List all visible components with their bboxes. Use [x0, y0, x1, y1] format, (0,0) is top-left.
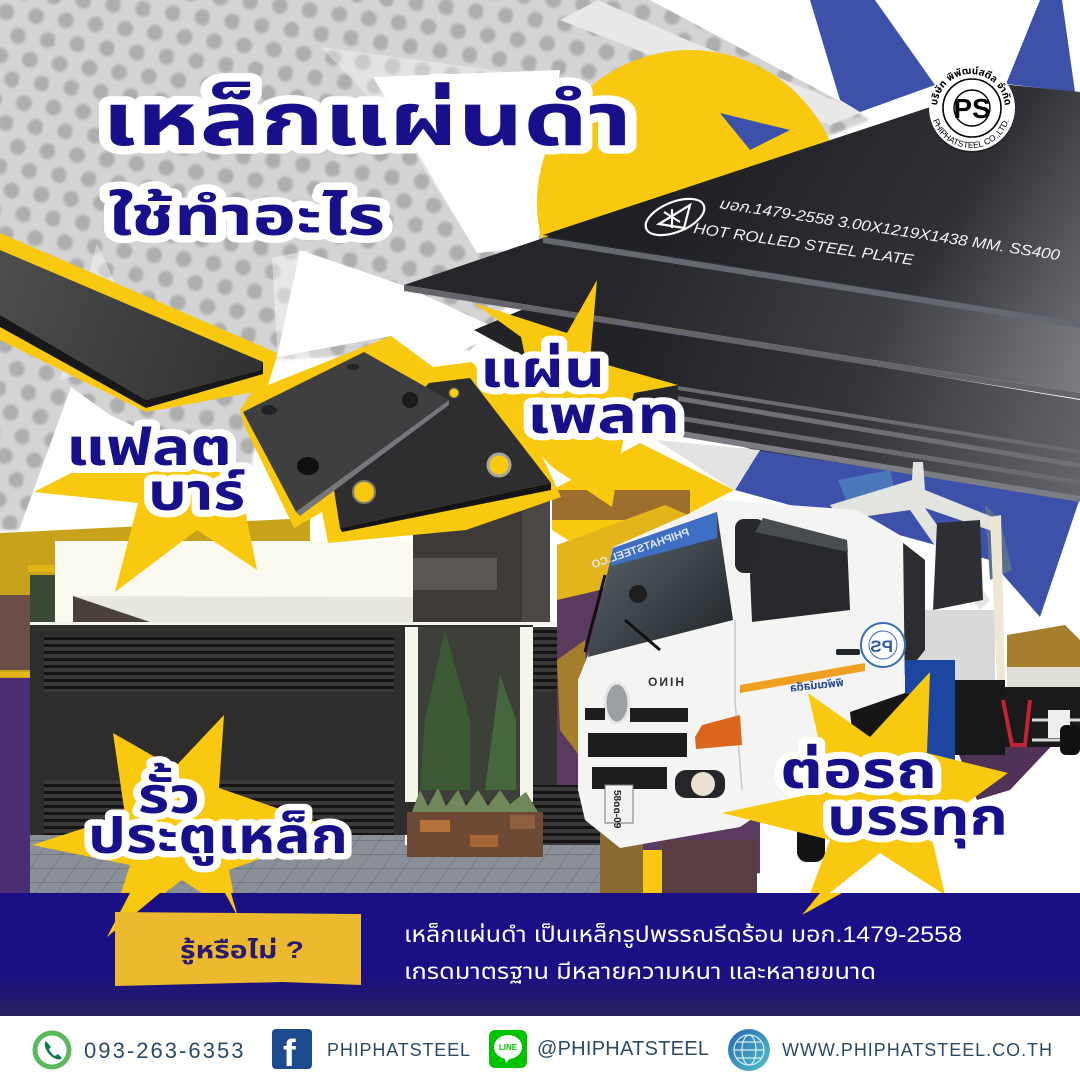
plate marking text: มอก.1479-2558 3.00X1219X1438 MM. SS400 [717, 195, 1062, 264]
icon: globe [728, 1029, 770, 1071]
plate marking emblem [641, 191, 709, 243]
icon: line [489, 1030, 527, 1068]
door window [750, 518, 850, 622]
windshield [588, 512, 733, 657]
wheel arch [850, 693, 925, 800]
label: truck: บรรทุก [827, 789, 1008, 848]
front panel line [735, 620, 742, 790]
plants [412, 788, 538, 812]
paving [30, 835, 600, 893]
star: fence [32, 715, 340, 937]
label: plate [480, 341, 680, 445]
white fascia [55, 541, 413, 622]
flat bar with yellow outline [0, 233, 277, 412]
description text [404, 922, 962, 984]
star tip truck [802, 893, 842, 915]
description text: เหล็กแผ่นดำ เป็นเหล็กรูปพรรณรีดร้อน มอก.1479-2558 [404, 922, 962, 948]
title: เหล็กแผ่นดำ [102, 78, 632, 161]
description text: เกรดมาตรฐาน มีหลายความหนา และหลายขนาด [404, 959, 876, 984]
wipers [585, 575, 660, 652]
label: plate: เพลท [527, 387, 680, 445]
orange stripe [740, 663, 865, 693]
windshield sun strip [611, 512, 717, 566]
star tips right of band [225, 893, 238, 917]
hino badge [605, 683, 629, 723]
tail frame [1007, 667, 1080, 687]
PS company logo [929, 66, 1015, 153]
PS company logo: บริษัท พิพัฒน์สตีล จำกัด [931, 66, 1011, 105]
door logo: PS [870, 637, 893, 656]
website: WWW.PHIPHATSTEEL.CO.TH [782, 1040, 1052, 1060]
PS company logo: PHIPHATSTEEL CO.,LTD. [933, 118, 1009, 148]
label: plate: แผ่น [480, 341, 605, 399]
label: truck: ต่อรถ [780, 742, 937, 800]
label: flat bar: แฟลต [66, 419, 232, 477]
star: plate [474, 280, 678, 507]
yellow circle [537, 50, 843, 356]
windshield lettering: PHIPHATSTEEL.CO [590, 526, 691, 571]
upper plate [243, 352, 449, 512]
star: truck [722, 672, 1008, 915]
icon: line: LINE [499, 1043, 518, 1052]
icon: facebook [272, 1029, 312, 1075]
PS company logo: PS [953, 93, 991, 124]
licence plate [605, 785, 633, 829]
label: truck [780, 742, 1008, 848]
did you know tag: รู้หรือไม่ ? [180, 936, 304, 965]
orange lamp [695, 715, 742, 749]
facebook name: PHIPHATSTEEL [327, 1040, 470, 1060]
did you know tag [115, 912, 361, 986]
steel gate [30, 625, 533, 835]
info band [0, 893, 1080, 1016]
contact footer [0, 1016, 1080, 1080]
title [102, 78, 632, 247]
lower plate [334, 378, 551, 528]
label: flat bar: บาร์ [148, 464, 246, 522]
body behind cab [905, 610, 995, 720]
door logo [861, 623, 905, 667]
yellow burst behind plates [240, 336, 561, 543]
licence plate: 58ดด-09 [611, 790, 622, 829]
headlight [675, 770, 725, 798]
door lettering: พิพัฒน์สตีล [789, 677, 844, 695]
blue triangles [720, 0, 1080, 617]
icon: facebook: f [283, 1033, 296, 1075]
label: flat bar [66, 419, 246, 522]
steel plate stack [404, 84, 1080, 502]
truck photo [578, 462, 1080, 862]
icon: phone [35, 1033, 69, 1067]
glass and tree [418, 627, 520, 802]
grille [585, 708, 688, 789]
line id: @PHIPHATSTEEL [537, 1038, 709, 1060]
star tips over band [107, 893, 160, 937]
phone number: 093-263-6353 [84, 1038, 245, 1063]
label: fence and gate: ประตูเหล็ก [88, 808, 348, 866]
title: ใช้ทำอะไร [108, 187, 385, 247]
door handle [836, 649, 860, 655]
blue column [905, 660, 955, 760]
cab body [578, 500, 905, 848]
photo: steel plates with holes [243, 352, 551, 532]
backdrop: duotone yellow and purple around house [0, 440, 1080, 893]
planter [407, 812, 543, 857]
photo: house with steel gate [30, 500, 600, 893]
star: flat bar [34, 465, 257, 592]
hino wordmark: HINO [646, 675, 684, 689]
right gate panel [533, 785, 600, 845]
plate marking text: HOT ROLLED STEEL PLATE [692, 220, 916, 269]
mirror [735, 519, 765, 573]
label: fence and gate [88, 763, 348, 866]
wheel [797, 820, 825, 862]
crane boom [838, 470, 900, 510]
label: fence and gate: รั้ว [138, 763, 200, 824]
